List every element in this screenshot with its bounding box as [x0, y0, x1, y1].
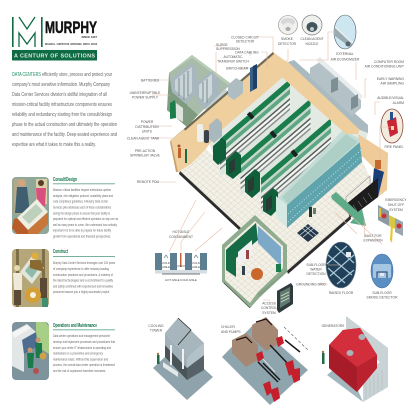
body: operations: develop and implement processes and procedures that	[53, 339, 116, 344]
illustration: consult design	[12, 177, 49, 234]
label text group: ALARM	[393, 101, 404, 105]
icon: emergency shut-off system	[378, 205, 403, 243]
icon: clean agent nozzle	[302, 15, 322, 35]
label text group: REMOTE PDU	[137, 180, 160, 184]
generators	[322, 316, 388, 402]
hot aisle cold aisle diagram: AISLE	[192, 265, 200, 269]
label text group: COMPUTER ROOM	[374, 60, 404, 64]
label text group: DETECTOR	[278, 42, 297, 46]
body: consult design: Services plan addresses each of these considerations	[53, 204, 111, 210]
cooling tower	[153, 318, 213, 400]
logo: SINCE 1907	[81, 35, 97, 39]
hot aisle cold aisle diagram: HOT AISLE COLD AISLE	[165, 278, 197, 282]
label text group: CLEAN AGENT	[300, 37, 324, 41]
row end caps	[213, 112, 298, 216]
raised floor	[178, 148, 378, 274]
logo: MURPHY	[45, 18, 97, 37]
label text group: SYSTEM	[389, 208, 403, 212]
detector icons	[278, 15, 403, 288]
label text group: AUTOMATIC	[223, 55, 243, 59]
label text group	[127, 36, 407, 334]
body: operations: maintenance basis. Without this supervision and	[53, 356, 108, 361]
hot aisle cold aisle diagram: AISLE	[162, 265, 170, 269]
label text group: SUB-FLOOR	[372, 291, 392, 295]
intro text: company's most sensitive information. Murphy Company	[12, 82, 110, 88]
heading: construct: Construct	[53, 249, 68, 255]
label text group: SUB-FLOOR	[306, 263, 326, 267]
label text group: DISTRIBUTION	[135, 125, 159, 129]
intro text: mission-critical facility infrastructure components ensures	[12, 102, 112, 108]
label text group: AIR ECONOMIZER	[331, 58, 360, 62]
label text group: WATER	[310, 268, 322, 272]
logo	[12, 17, 97, 60]
label text group: UNITS	[142, 130, 153, 134]
label text group: AIR CONDITIONING UNIT	[365, 64, 404, 68]
body: operations: maintained on a preventive and emergency	[53, 351, 103, 356]
label text group: TOWER	[150, 328, 163, 332]
logo: A CENTURY OF SOLUTIONS	[14, 54, 95, 60]
rear air handler band	[283, 57, 368, 134]
icon: external air economizer	[334, 15, 356, 49]
body: operations: ensure your entire IT infrastructure is operating and	[53, 345, 111, 350]
intro text: and maintenance of the facility. Deep-seated experience and	[12, 132, 117, 138]
raised floor tile detail	[297, 224, 319, 242]
label text group: SUPPRESSION	[216, 47, 240, 51]
label text group: ACCESS	[262, 302, 277, 306]
access control device	[277, 283, 293, 313]
body: construct: and safety combined with experienced and innovative	[53, 283, 113, 288]
label text group: SHUT-OFF	[388, 203, 404, 207]
body: operations: and the risk of unplanned downtime increases.	[53, 368, 106, 373]
body: consult design: well as many years to come. We understand how critically	[53, 222, 117, 227]
heading: operations: Operations and Maintenance	[53, 323, 97, 329]
label text group: NOZZLE	[305, 42, 319, 46]
body: operations: process, the overall data center operation is threatened	[53, 362, 115, 367]
body: consult design: growth from operational and financial perspectives.	[53, 233, 111, 238]
intro text: reliability and redundancy starting from the consult/design	[12, 112, 112, 118]
label text group: SURGE	[216, 43, 229, 47]
label text group: DETECTION	[306, 272, 326, 276]
label text group: EXTERNAL	[336, 52, 354, 56]
hot aisle cold aisle diagram: COLD	[162, 261, 170, 265]
label text group: POWER SUPPLY	[132, 96, 159, 100]
tan end wall	[345, 134, 388, 218]
body: operations: Data center operations and management personnel	[53, 333, 110, 338]
panel: consult design	[12, 177, 118, 238]
label text group: SPRINKLER VALVE	[130, 154, 161, 158]
label text group: BATTERIES	[141, 78, 160, 82]
label text group: POWER	[141, 120, 154, 124]
intro text: expertise are what it takes to make this a reality.	[12, 142, 96, 148]
built for expansion arrow	[331, 192, 366, 226]
callout leader lines	[151, 32, 394, 300]
label text group: HOT AISLE	[173, 230, 190, 234]
label text group: PRE-ACTION	[135, 149, 156, 153]
glass containment aisle	[276, 130, 362, 228]
body: consult design	[53, 187, 118, 238]
body: construct: Murphy Data Center Services leverages over 100 years	[53, 260, 115, 265]
access room	[222, 215, 287, 308]
label text group: SMOKE	[281, 37, 294, 41]
panel: construct	[12, 249, 115, 307]
icon: raised floor	[326, 242, 356, 288]
label text group: RAISED FLOOR	[329, 291, 354, 295]
intro text: DATA CENTERS efficiently store, process and protect your	[12, 72, 112, 78]
tan perimeter wall	[170, 52, 288, 172]
icon: fire panel	[381, 109, 403, 143]
logo: MECHANICAL · CONSTRUCTION · MAINTENANCE · SERVICE · DESIGN	[45, 42, 97, 46]
intro text: phase to the actual construction and ultimately the operation	[12, 122, 117, 128]
icon: smoke detector	[278, 16, 298, 34]
body: consult design: important it is to be able to prepare for future facility	[53, 228, 111, 233]
body: construct	[53, 260, 115, 294]
body: consult design: analysis, risk mitigation protocol, scalability plans and	[53, 193, 113, 198]
label text group: AIR SAMPLING	[381, 82, 404, 86]
body: consult design: prepared for optimal and efficient operation on day one as	[53, 216, 118, 221]
label text group: EXPANSION	[364, 238, 383, 242]
label text group: CONTROL	[261, 306, 277, 310]
illustration: construct	[12, 249, 49, 307]
body: construct: personnel assure you a highly successful project.	[53, 289, 110, 294]
intro text: Data Center Services division's skillful integration of all	[12, 92, 107, 98]
label text group: EMERGENCY	[385, 198, 407, 202]
heading: consult design: Consult/Design	[53, 177, 77, 183]
label text group: TRANSFER SWITCH	[217, 60, 249, 64]
label text group: UNINTERRUPTIBLE	[130, 91, 161, 95]
body: operations	[53, 333, 116, 373]
body: construct: the latest technologies and a commitment to quality	[53, 278, 113, 283]
label text group: CLEAN AGENT TANK	[127, 136, 160, 140]
label text group: BUILT FOR	[365, 234, 382, 238]
body: consult design: Mission critical facilities require meticulous uptime	[53, 187, 111, 192]
hot aisle cold aisle diagram	[155, 253, 207, 282]
icon: sub-floor smoke detector	[371, 254, 393, 288]
label text group: EARLY WARNING	[377, 77, 404, 81]
label text group: AND PUMPS	[221, 330, 241, 334]
server rows	[213, 79, 331, 216]
body: consult design: code compliance guidelines. A Murphy Data Center	[53, 199, 108, 204]
battery room	[167, 55, 230, 127]
label text group: DATA CABLING	[235, 50, 259, 54]
hot aisle cold aisle diagram: COLD	[192, 261, 200, 265]
label text group: CHILLER	[221, 325, 236, 329]
illustration: operations	[12, 322, 49, 380]
label text group: CLOSED CIRCUIT	[231, 36, 259, 40]
label text group: DETECTOR	[236, 40, 255, 44]
body: construct: of company experience to offer industry-leading	[53, 266, 109, 271]
label text group: AUDIBLE/VISUAL	[377, 96, 404, 100]
label text group: GENERATORS	[322, 324, 345, 328]
intro text	[12, 72, 117, 148]
label text group: FIRE PANEL	[384, 145, 404, 149]
label text group: COOLING	[148, 324, 164, 328]
panel: operations and maintenance	[12, 322, 116, 380]
label text group: SYSTEM	[262, 311, 276, 315]
body: consult design: during the design phase to ensure that your facility is	[53, 210, 110, 215]
body: construct: construction practices and procedures. A mastery of	[53, 272, 114, 277]
label text group: SWITCHGEAR	[226, 66, 249, 70]
label text group: SMOKE DETECTOR	[367, 296, 398, 300]
label text group: CONTAINMENT	[169, 235, 193, 239]
chillers and pumps	[222, 317, 308, 405]
label text group: GROUNDING GRID	[296, 282, 326, 286]
data hall floor base	[205, 52, 368, 226]
technician in hall	[309, 207, 316, 217]
